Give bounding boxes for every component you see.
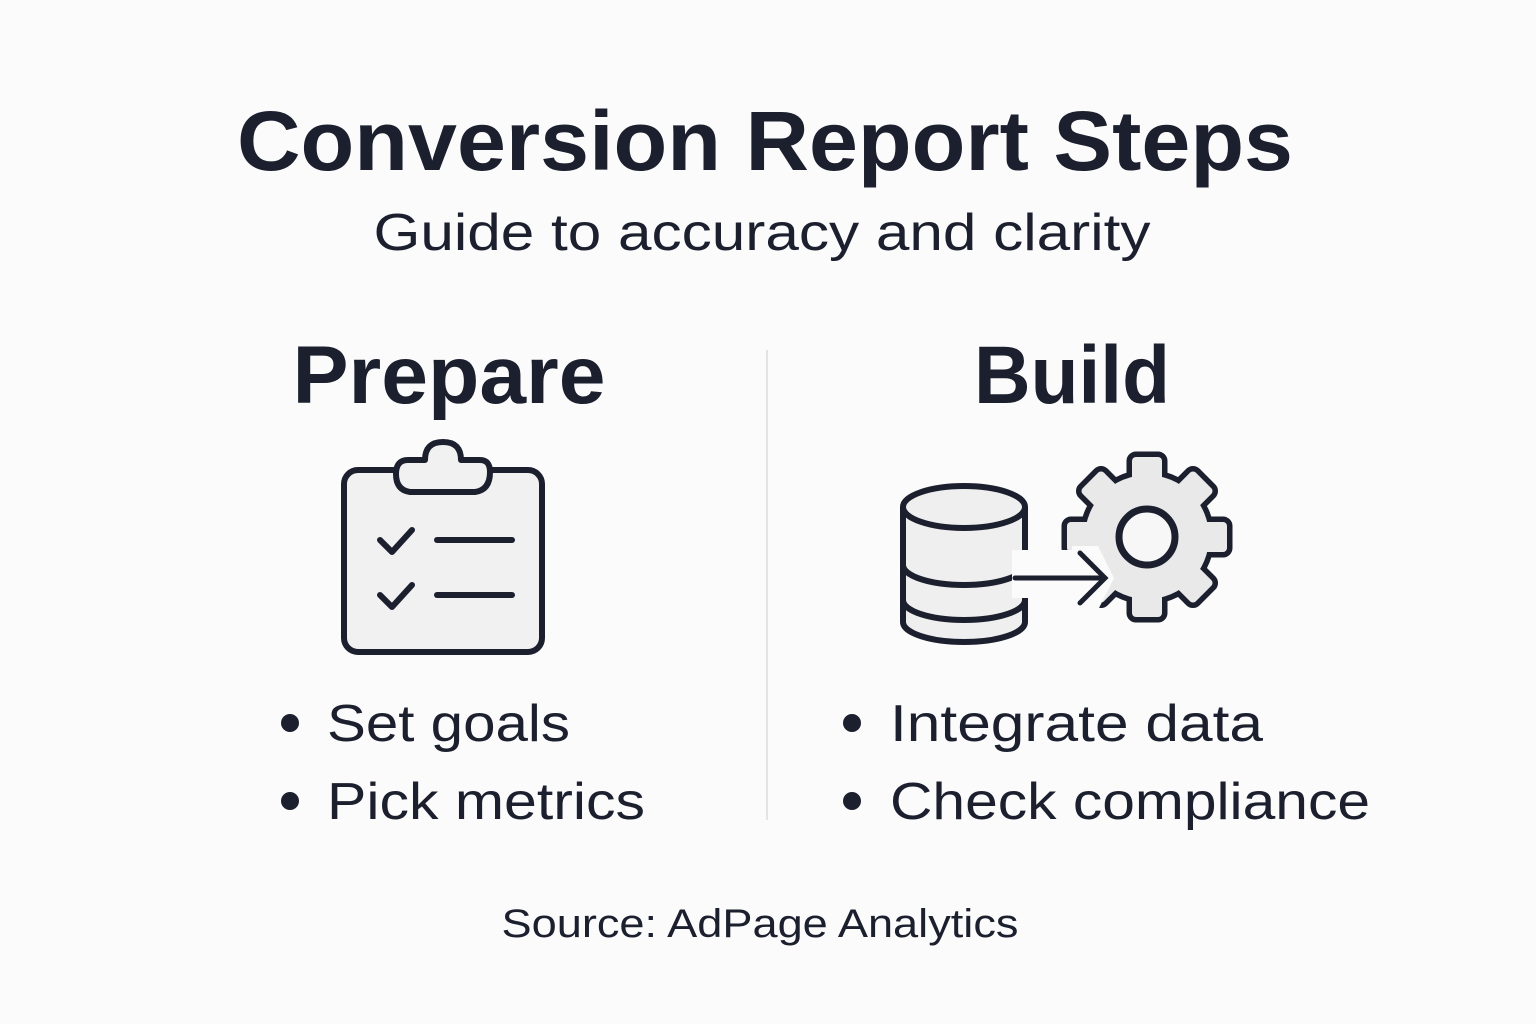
- list: build bullets: Check compliance: [890, 773, 1370, 831]
- list: prepare bullets: Pick metrics: [327, 773, 645, 831]
- icon: database to gear: [903, 457, 1227, 642]
- source note: Source: AdPage Analytics: [502, 902, 1018, 946]
- heading: Prepare: Prepare: [292, 330, 606, 421]
- list: build bullets: [843, 695, 1370, 831]
- list: prepare bullets: [281, 695, 645, 831]
- list: prepare bullets: Set goals: [327, 695, 570, 753]
- heading: Build: Build: [974, 330, 1170, 421]
- title: Conversion Report Steps: [237, 94, 1293, 188]
- list: build bullets: Integrate data: [890, 695, 1263, 753]
- icon: clipboard: [344, 442, 542, 652]
- subtitle: Guide to accuracy and clarity: [374, 204, 1150, 262]
